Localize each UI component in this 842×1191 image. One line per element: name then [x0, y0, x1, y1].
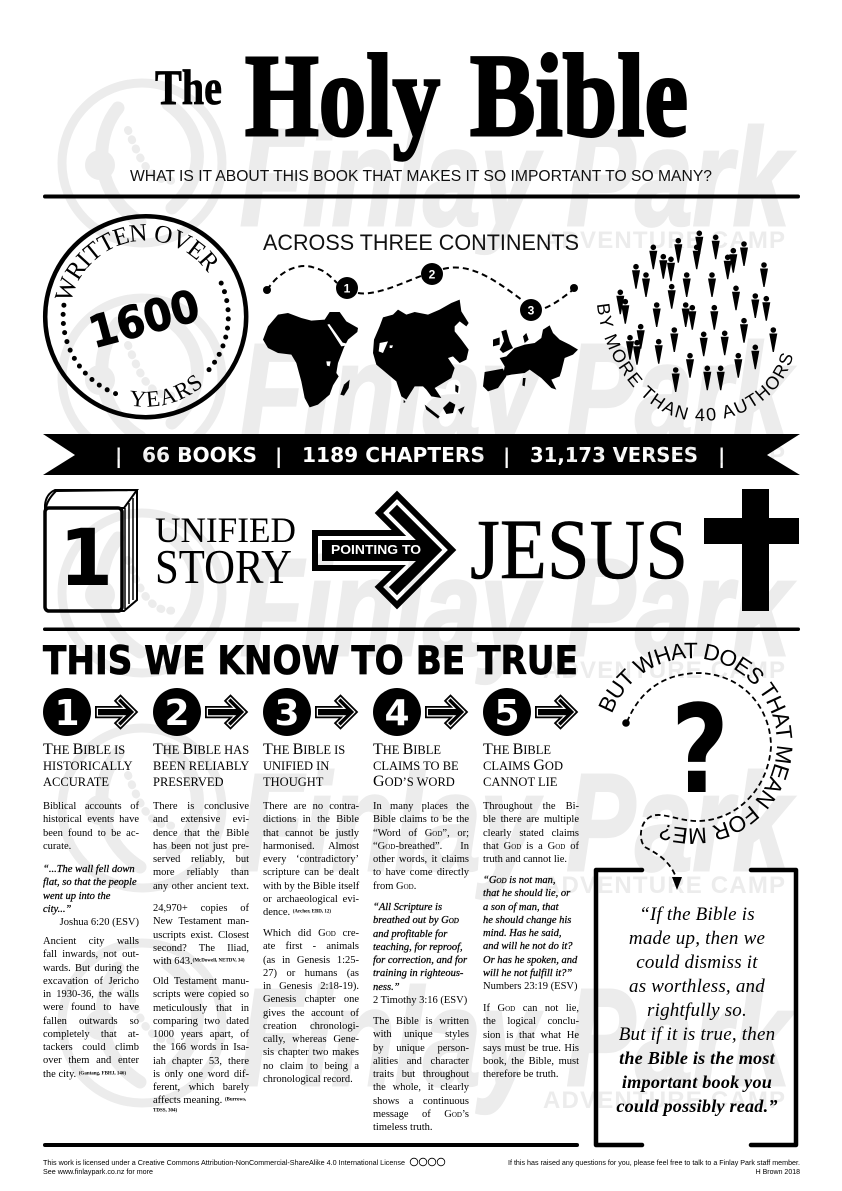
column 2 copies: New Testament man- — [153, 916, 249, 927]
column 5 body: book, the Bible, must — [483, 1056, 579, 1067]
column 3 body — [263, 928, 359, 1085]
column 4 body: message of God’s — [373, 1109, 469, 1120]
column 2 intro: served reliably, but — [153, 854, 249, 865]
ribbon banner: 1189 CHAPTERS — [302, 443, 485, 467]
ribbon banner — [43, 434, 800, 475]
map: europe — [483, 325, 578, 391]
column 3 body: Genesis chapter one — [263, 994, 359, 1005]
pull quote — [616, 904, 778, 1116]
column 1 body: were found to have — [43, 1002, 139, 1013]
column 4 body: The Bible is written — [373, 1016, 469, 1027]
column 3 body: 27) or humans (as — [263, 968, 359, 979]
column 2 old testament: the 166 words in Isa- — [153, 1042, 249, 1053]
step heading 2: THE BIBLE HAS — [153, 741, 249, 758]
column 5 body: therefore be truth. — [483, 1069, 559, 1080]
column 1 body: in 1930-36, the walls — [43, 989, 139, 1000]
column 5 quote: mind. Has he said, — [483, 928, 561, 939]
map: africa — [263, 312, 358, 407]
footer right — [508, 1160, 800, 1176]
dashed route with three stops — [263, 263, 578, 321]
step heading 4 — [373, 741, 459, 790]
column 1 body: fallen outwards so — [43, 1016, 139, 1026]
column 4 intro: “God-breathed”. In — [373, 841, 469, 852]
column 2 old testament: ferent, which barely — [153, 1082, 249, 1093]
footer left: This work is licensed under a Creative Commons Attribution-NonCommercial-ShareAlike 4.0 International License — [43, 1160, 405, 1167]
ribbon banner: 66 BOOKS — [142, 443, 257, 467]
column 3 body: chronological record. — [263, 1074, 353, 1085]
column 4 intro: In many places the — [373, 801, 469, 812]
column 4 body: timeless truth. — [373, 1122, 432, 1133]
heading: this we know to be true: THIS WE KNOW TO BE TRUE — [43, 639, 578, 684]
column 1 body: Ancient city walls — [43, 936, 139, 947]
column 3 intro: dence. (Archer, EBD, 12) — [263, 907, 331, 918]
number badges with arrows: 1 — [54, 693, 80, 734]
column 5 quote: Numbers 23:19 (ESV) — [483, 981, 578, 992]
step heading 5 — [483, 741, 563, 789]
column 2 copies — [153, 903, 249, 967]
column 1 quote: Joshua 6:20 (ESV) — [60, 917, 139, 928]
column 3 body: creation chronologi- — [263, 1021, 359, 1032]
text: unified story: UNIFIED — [155, 510, 296, 550]
column 5 body: says must be true. His — [483, 1043, 579, 1054]
number badges with arrows: 5 — [494, 693, 520, 734]
pull quote: rightfully so. — [647, 1000, 747, 1021]
column 5 body: the logical conclu- — [483, 1016, 579, 1027]
dashed path to quote — [622, 673, 771, 890]
icon: book with number one — [45, 490, 137, 611]
column 2 copies: with 643.(McDowell, NETDV, 34) — [153, 956, 245, 967]
column 3 body: Which did God cre- — [263, 928, 359, 939]
big question mark: ? — [671, 679, 729, 821]
pull quote: “If the Bible is — [639, 904, 755, 925]
column 2 copies: second? The Iliad, — [153, 943, 249, 954]
column 1 quote: “...The wall fell down — [43, 864, 135, 875]
curved caption: by more than 40 authors: BY MORE THAN 40 AUTHORS — [597, 304, 792, 421]
dashed route with three stops: 3 — [528, 304, 535, 318]
column 4 body: with unique styles — [373, 1029, 469, 1040]
stamp: written over 1600 years: 1600 — [84, 280, 205, 359]
column 5 quote: a son of man, that — [483, 902, 559, 912]
map: asia — [373, 300, 469, 419]
pull quote: could possibly read.” — [616, 1096, 778, 1116]
footer right: H Brown 2018 — [756, 1169, 800, 1176]
column 1 quote — [43, 864, 139, 928]
column 4 body: the whole, it clearly — [373, 1082, 469, 1093]
column 4 intro: Bible claims to be the — [373, 814, 469, 825]
column 1 body: over them and enter — [43, 1055, 139, 1066]
column 2 old testament: comparing two dated — [153, 1016, 249, 1027]
column 2 old testament: scripts were copied so — [153, 989, 249, 1000]
column 4 quote — [373, 902, 468, 1006]
column 1 body: excavation of Jericho — [43, 976, 139, 987]
pull quote: the Bible is the most — [619, 1048, 776, 1068]
column 2 old testament: iah chapter 53, there — [153, 1056, 249, 1066]
creative commons icons — [410, 1158, 445, 1166]
step heading 2 — [153, 741, 249, 789]
number badges with arrows: 3 — [274, 693, 300, 734]
column 5 body: sion is that what He — [483, 1030, 579, 1040]
column 4 quote: “All Scripture is — [373, 902, 442, 913]
dashed route with three stops: 2 — [429, 268, 436, 282]
footer left: See www.finlaypark.co.nz for more — [43, 1169, 153, 1176]
column 3 body: in Genesis 2:18-19). — [263, 981, 359, 992]
column 2 intro — [153, 801, 249, 892]
text: unified story — [155, 510, 296, 594]
step heading 1: ACCURATE — [43, 775, 109, 789]
column 4 quote: ness.” — [373, 982, 400, 992]
text: jesus: JESUS — [470, 501, 688, 597]
column 3 intro: or archaeological evi- — [263, 894, 359, 905]
column 1 body: tackers could climb — [43, 1042, 139, 1053]
step heading 2: BEEN RELIABLY — [153, 759, 249, 773]
column 5 intro: that God is a God of — [483, 841, 579, 852]
column 1 body: fall inwards, not out- — [43, 949, 139, 960]
top rule — [43, 194, 800, 198]
column 3 intro: There are no contra- — [263, 801, 359, 812]
column 5 quote: “God is not man, — [483, 875, 556, 886]
column 3 intro — [263, 801, 360, 918]
column 1 quote: flat, so that the people — [43, 877, 137, 888]
column 3 intro: with by the Bible itself — [263, 880, 359, 892]
column 1 body: the city. (Gantang, FBHJ, 146) — [43, 1068, 126, 1080]
column 4 body: alities and character — [373, 1056, 469, 1067]
title: Bible — [470, 30, 688, 161]
curved text: but what does that mean for me: BUT WHAT DOES THAT MEAN FOR ME? — [598, 642, 792, 844]
column 5 intro: clearly stated claims — [483, 828, 579, 838]
column 1 body — [43, 936, 139, 1080]
step heading 1: THE BIBLE IS — [43, 741, 125, 758]
column 2 intro: dence that the Bible — [153, 828, 249, 838]
middle rule — [43, 628, 800, 631]
column 5 intro: truth and cannot lie. — [483, 854, 567, 865]
pull quote: made up, then we — [629, 928, 765, 949]
column 1 quote: city...” — [43, 904, 71, 915]
column 5 intro: Throughout the Bi- — [483, 801, 579, 812]
column 2 copies: 24,970+ copies of — [153, 903, 249, 914]
column 4 intro: to have come directly — [373, 867, 469, 878]
footer left — [43, 1160, 405, 1176]
column 4 intro: other words, it claims — [373, 854, 469, 865]
column 2 intro: more reliably than — [153, 867, 249, 878]
column 3 body: gives the account of — [263, 1008, 359, 1018]
heading: across three continents: ACROSS THREE CONTINENTS — [263, 230, 579, 255]
column 3 body: (as in Genesis 1:25- — [263, 954, 359, 966]
column 4 intro: “Word of God”, or; — [373, 828, 469, 838]
step heading 3: UNIFIED IN — [263, 759, 329, 773]
number badges with arrows — [43, 688, 575, 736]
column 2 old testament: affects meaning. (Burrows, — [153, 1095, 246, 1106]
column 5 quote: Or has he spoken, and — [483, 954, 577, 966]
column 4 quote: breathed out by God — [373, 915, 459, 926]
column 2 old testament: meticulously that in — [153, 1002, 249, 1014]
column 4 body: by unique person- — [373, 1042, 469, 1054]
stamp: written over 1600 years — [42, 214, 248, 420]
stamp: written over 1600 years: WRITTEN OVER — [54, 224, 217, 298]
ribbon banner: | — [115, 444, 122, 468]
column 1 intro: curate. — [43, 841, 71, 852]
ribbon banner: | — [718, 444, 725, 468]
pull quote: important book you — [622, 1072, 772, 1092]
column 4 body: traits but throughout — [373, 1069, 469, 1080]
bottom rule — [43, 1143, 579, 1147]
step heading 5: THE BIBLE — [483, 741, 551, 758]
column 4 intro: from God. — [373, 880, 416, 892]
icon: cross — [704, 489, 799, 611]
ribbon banner: | — [503, 444, 510, 468]
stamp: written over 1600 years: YEARS — [130, 374, 202, 407]
step heading 3: THOUGHT — [263, 775, 323, 789]
step heading 4: GOD’S WORD — [373, 773, 455, 790]
column 1 intro — [43, 801, 139, 852]
column 3 body: cally, whereas Gene- — [263, 1034, 359, 1045]
icon group: forty authors — [616, 230, 777, 392]
step heading 4: THE BIBLE — [373, 741, 441, 758]
column 2 old testament: is only one word dif- — [153, 1069, 249, 1080]
column 2 old testament: TDSS, 304) — [153, 1108, 177, 1113]
pull quote: could dismiss it — [636, 952, 758, 973]
step heading 3: THE BIBLE IS — [263, 741, 345, 758]
column 4 quote: and profitable for — [373, 928, 447, 940]
subtitle: WHAT IS IT ABOUT THIS BOOK THAT MAKES IT SO IMPORTANT TO SO MANY? — [130, 168, 712, 185]
step heading 5: CLAIMS GOD — [483, 757, 563, 774]
column 3 body: sis chapter two makes — [263, 1047, 359, 1058]
column 4 quote: 2 Timothy 3:16 (ESV) — [373, 995, 467, 1006]
column 5 quote: that he should lie, or — [483, 888, 570, 899]
step heading 1: HISTORICALLY — [43, 759, 132, 773]
column 3 intro: that cannot be justly — [263, 828, 359, 838]
column 1 quote: went up into the — [43, 890, 110, 902]
pull quote: But if it is true, then — [619, 1024, 775, 1045]
column 1 intro: Biblical accounts of — [43, 801, 139, 812]
arrow: pointing to — [320, 502, 445, 598]
column 2 old testament: Old Testament manu- — [153, 976, 249, 987]
step heading 4: CLAIMS TO BE — [373, 759, 459, 773]
icon: book with number one: 1 — [59, 514, 113, 604]
ribbon banner: | — [275, 444, 282, 468]
step heading 1 — [43, 741, 132, 789]
column 5 body — [483, 1003, 579, 1080]
column 5 quote: will he not fulfill it?” — [483, 968, 572, 979]
column 4 body: shows a continuous — [373, 1096, 469, 1106]
column 2 old testament — [153, 976, 249, 1113]
step heading 5: CANNOT LIE — [483, 775, 557, 789]
title — [155, 30, 688, 161]
number badges with arrows: 2 — [164, 693, 190, 734]
text: unified story: STORY — [155, 539, 292, 594]
column 1 body: completely that at- — [43, 1029, 139, 1040]
title: Holy — [245, 30, 440, 161]
column 5 intro: ble there are multiple — [483, 814, 579, 825]
number badges with arrows: 4 — [384, 693, 410, 734]
column 1 body: wards. But during the — [43, 962, 139, 974]
column 4 quote: for correction, and for — [373, 955, 467, 966]
column 4 quote: training in righteous- — [373, 968, 463, 979]
footer right: If this has raised any questions for you, please feel free to talk to a Finlay Park staff member. — [508, 1160, 800, 1167]
column 4 body — [373, 1016, 469, 1133]
title: The — [155, 59, 222, 115]
column 5 quote: and will he not do it? — [483, 941, 573, 952]
column 3 body: no claim to being a — [263, 1060, 359, 1072]
column 5 intro — [483, 801, 579, 865]
arrow: pointing to: POINTING TO — [331, 543, 421, 557]
pull quote: as worthless, and — [629, 976, 765, 997]
column 4 intro — [373, 801, 469, 892]
dashed route with three stops: 1 — [344, 282, 351, 296]
column 2 intro: has been not just pre- — [153, 841, 249, 852]
column 3 body: ate first - animals — [263, 941, 359, 952]
column 5 body: If God can not lie, — [483, 1003, 579, 1014]
column 1 intro: historical events have — [43, 814, 139, 825]
column 3 intro: harmonised. Almost — [263, 841, 359, 852]
step heading 3 — [263, 741, 345, 789]
ribbon banner: 31,173 VERSES — [530, 443, 698, 467]
column 3 intro: scripture can be dealt — [263, 867, 359, 878]
column 3 intro: dictions in the Bible — [263, 814, 359, 825]
column 2 intro: There is conclusive — [153, 801, 249, 812]
column 2 intro: and extensive evi- — [153, 814, 249, 825]
column 5 quote: he should change his — [483, 915, 571, 926]
bracket frame around quote — [596, 870, 796, 1145]
column 1 intro: been found to be ac- — [43, 828, 139, 838]
column 4 quote: teaching, for reproof, — [373, 942, 463, 953]
column 2 copies: uscripts exist. Closest — [153, 930, 249, 940]
column 5 quote — [483, 875, 578, 992]
column 3 intro: every ‘contradictory’ — [263, 854, 359, 865]
column 2 old testament: 1000 years apart, of — [153, 1029, 249, 1040]
step heading 2: PRESERVED — [153, 775, 224, 789]
column 2 intro: any other ancient text. — [153, 880, 249, 892]
